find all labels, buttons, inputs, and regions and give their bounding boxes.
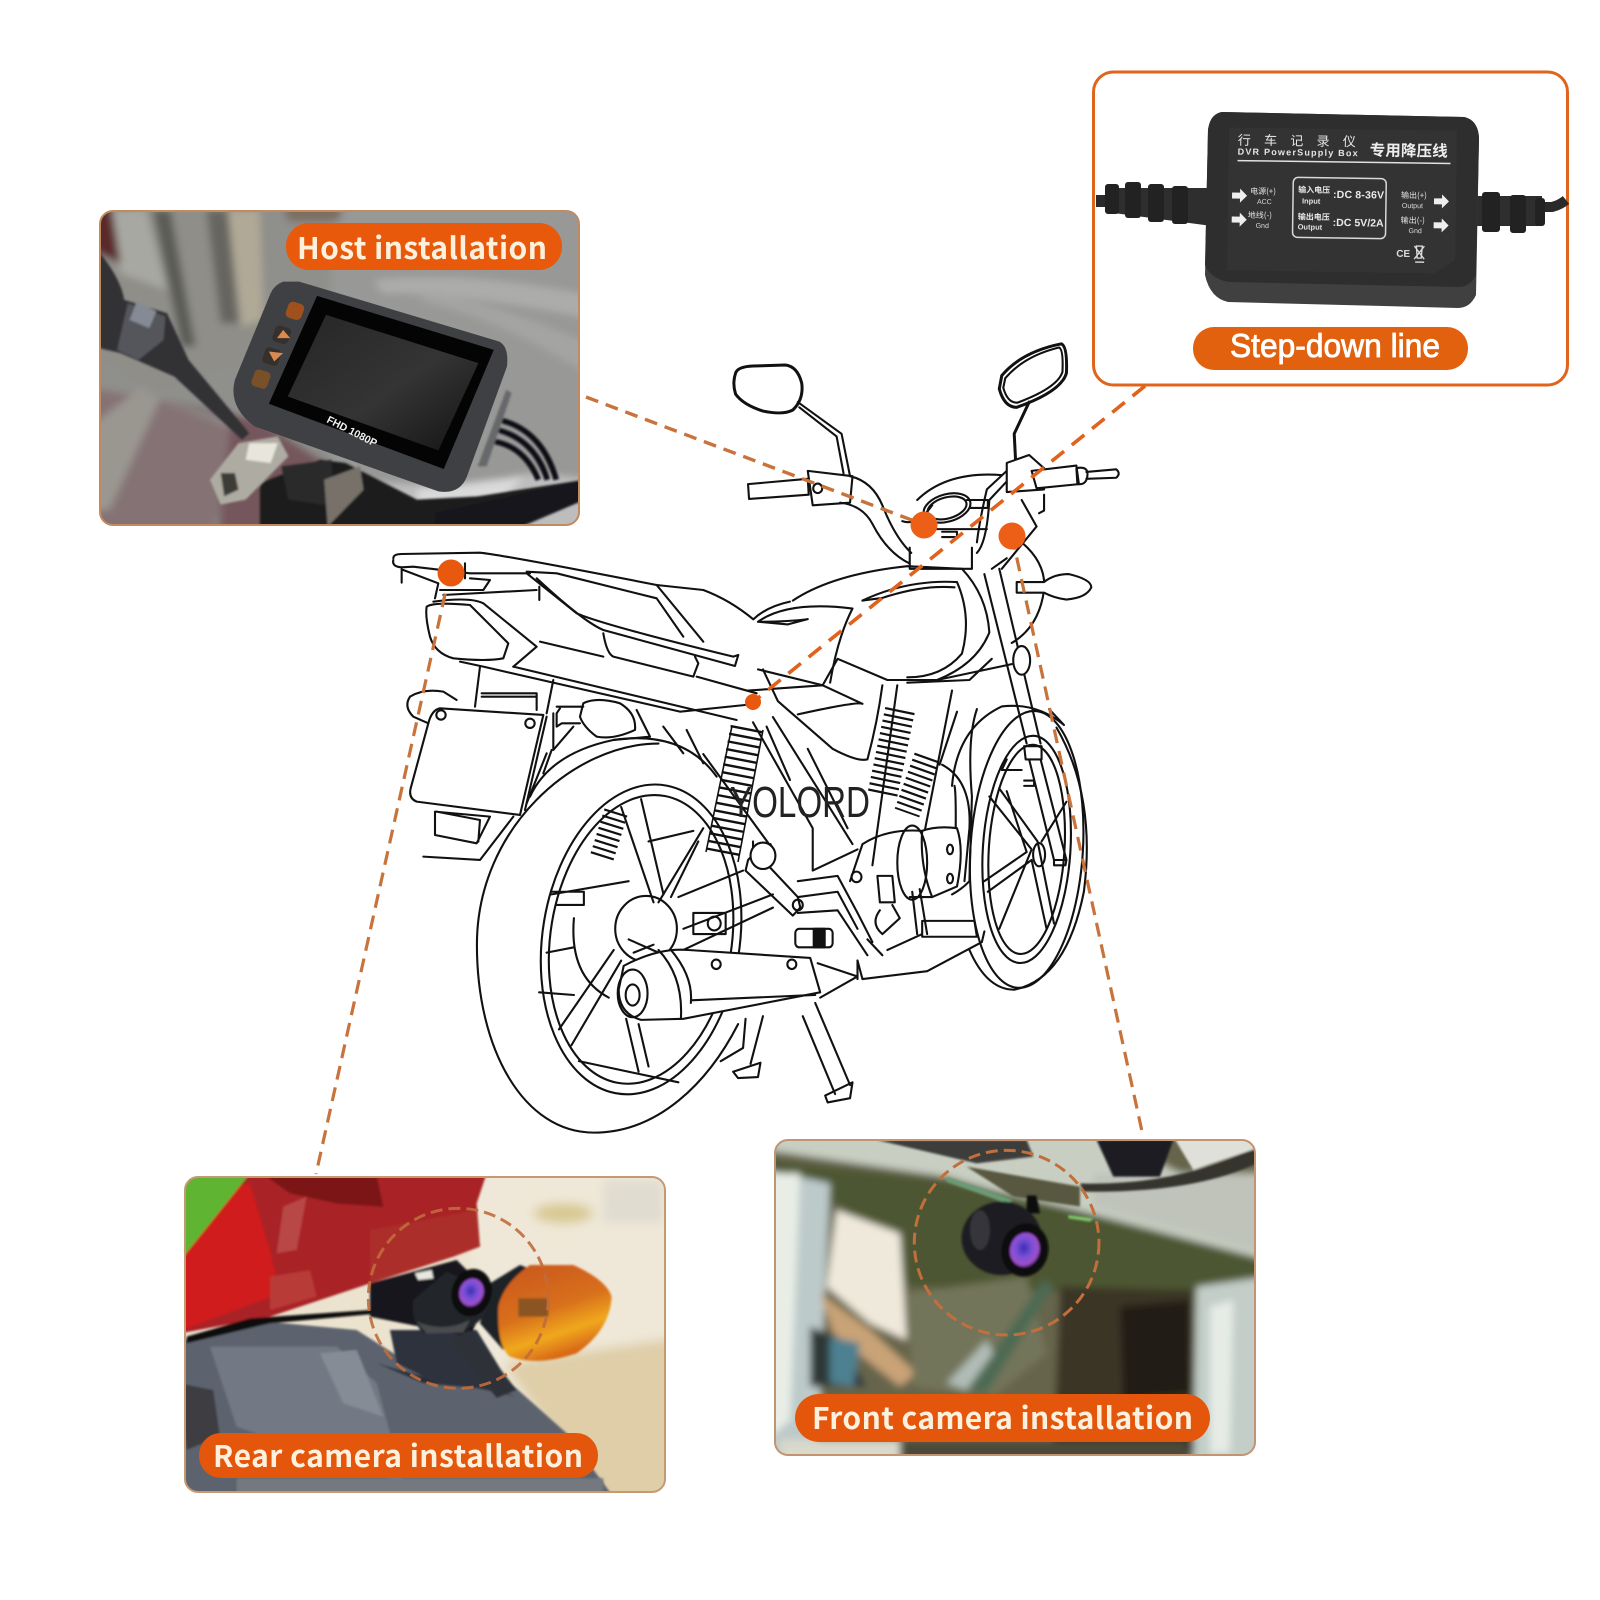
mudflap — [423, 812, 513, 860]
icon: left cable with strain relief — [1096, 182, 1212, 226]
label: FHD 1080P: FHD 1080P — [325, 414, 379, 450]
seat strip — [527, 572, 738, 666]
passenger peg — [746, 843, 803, 916]
dashed leader: rear camera — [316, 572, 450, 1174]
device: DVR power supply box: 输出电压 — [1298, 211, 1330, 223]
rear shock spring — [706, 726, 763, 862]
licence plate — [410, 708, 547, 815]
device: DVR power supply box: 地线(-) — [1248, 210, 1272, 221]
rear turn signals — [407, 691, 650, 750]
fork — [984, 569, 1066, 866]
dashed leader: step-down line — [753, 386, 1145, 702]
speedometer — [921, 488, 988, 537]
device: DVR power supply box: :DC 8-36V — [1333, 189, 1384, 202]
device: DVR power supply box: Output — [1402, 203, 1423, 210]
device: DVR power supply box: 专用降压线 — [1370, 138, 1448, 162]
device: DVR power supply box: 行车记录仪 — [1238, 130, 1356, 150]
motorcycle line drawing — [393, 344, 1119, 1133]
panel: host installation — [99, 210, 580, 526]
exhaust — [618, 950, 858, 1020]
footrest and pedal — [798, 876, 984, 979]
rear body: rack, seat, tail, plate, signals — [393, 553, 790, 860]
pill: Host installation: Host installation — [297, 224, 547, 268]
watermark: YOLORD: YOLORD — [730, 778, 870, 827]
rear hub spring — [601, 812, 616, 860]
side panel and tail cover — [748, 669, 882, 760]
dashed leader: front camera — [1012, 536, 1143, 1136]
device: DVR power supply box: CE — [1396, 249, 1411, 260]
dashed leader: host installation — [586, 397, 925, 525]
rear fender — [527, 738, 717, 803]
luggage rack — [393, 553, 790, 619]
pill: Front camera installation: Front camera installation — [812, 1394, 1193, 1438]
marker: rear camera position — [438, 560, 464, 586]
marker: step-down position — [745, 694, 761, 710]
fuel tank — [758, 566, 1012, 685]
panel: rear camera installation — [184, 1176, 666, 1493]
device: DVR power supply box: DVR PowerSupply Box — [1238, 147, 1358, 158]
pill: Step-down line: Step-down line — [1230, 327, 1440, 364]
marker: front camera position — [998, 522, 1026, 550]
device: DVR power supply box: :DC 5V/2A — [1333, 217, 1384, 230]
device: DVR power supply box: Gnd — [1409, 228, 1422, 235]
pill: Rear camera installation: Rear camera installation — [213, 1432, 583, 1476]
side cover — [460, 633, 790, 780]
headlight cowl and signal — [1012, 542, 1091, 675]
kickstand pivot — [795, 929, 833, 947]
device: DVR power supply box — [1205, 112, 1479, 308]
handlebar — [748, 455, 1119, 569]
panel: front camera installation — [767, 1130, 1267, 1467]
rear wheel and tyre — [477, 744, 764, 1133]
panel: step-down line — [1094, 72, 1568, 385]
right mirror — [999, 344, 1067, 463]
tail light — [426, 600, 537, 667]
engine — [850, 826, 961, 934]
device: DVR power supply box: 输出(+) — [1401, 190, 1427, 201]
seat front — [758, 606, 853, 683]
device: DVR power supply box: ACC — [1257, 199, 1272, 206]
front wheel — [952, 706, 1092, 992]
device: DVR power supply box: Gnd — [1256, 223, 1269, 230]
device: DVR power supply box: 电源(+) — [1250, 186, 1276, 197]
device: DVR power supply box: Input — [1302, 196, 1321, 206]
device: DVR power supply box: 输入电压 — [1298, 184, 1330, 196]
device: DVR power supply box: Output — [1298, 222, 1323, 232]
left mirror — [734, 365, 850, 476]
pill: Step-down line — [1193, 327, 1468, 370]
swingarm — [629, 894, 773, 953]
middle spring — [882, 710, 927, 813]
frame — [703, 685, 977, 894]
device: DVR power supply box: 输出(-) — [1401, 215, 1425, 226]
icon: right cable with strain relief — [1476, 192, 1566, 233]
main stand — [721, 1003, 853, 1102]
marker: host position — [910, 512, 938, 538]
